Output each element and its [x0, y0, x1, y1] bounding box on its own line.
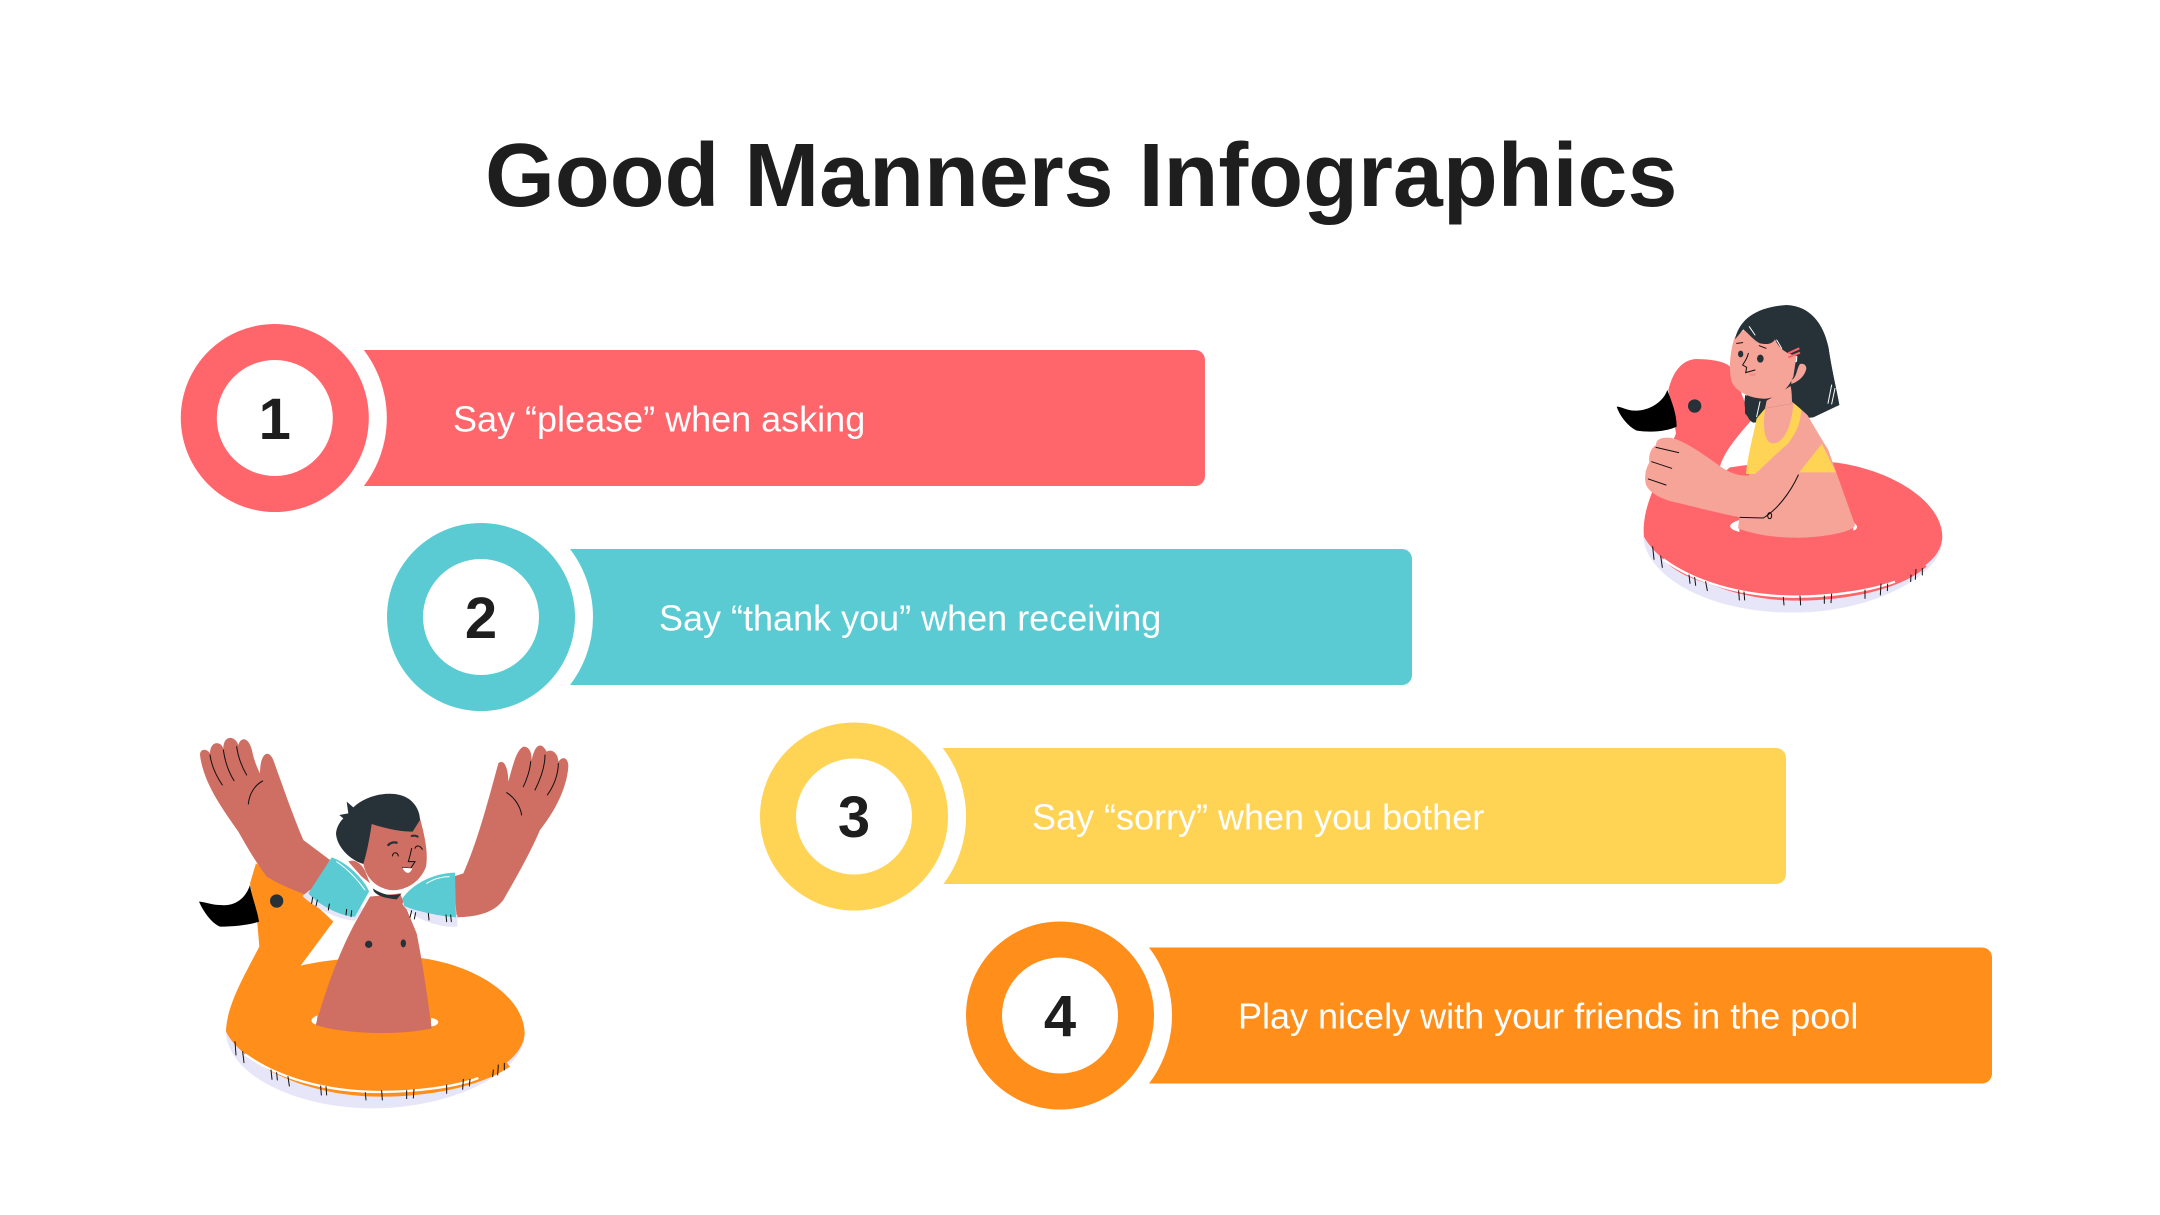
number ring 2 [387, 523, 575, 711]
label 3: Say “sorry” when you bother [1032, 796, 1484, 838]
ear [348, 861, 370, 883]
row 3: say sorry [742, 704, 1786, 928]
swimsuit [1746, 402, 1836, 474]
neck skin [1765, 386, 1793, 408]
bar 3 [880, 748, 1786, 884]
icon: boy in duck float [199, 738, 568, 1108]
row 1: say please [163, 306, 1205, 530]
neck shadow [373, 888, 402, 899]
left floatie [308, 857, 369, 917]
float lower stripe [1662, 553, 1927, 601]
number ring 3 [760, 722, 948, 910]
float stitches [1653, 547, 1922, 605]
label 4: Play nicely with your friends in the pool [1238, 996, 1858, 1036]
face features [388, 836, 422, 873]
label 1: Say “please” when asking [453, 398, 865, 440]
floatie stitches [312, 897, 451, 922]
beak [1617, 390, 1677, 432]
row 4: play nicely [948, 904, 1992, 1128]
bar 1 [300, 350, 1205, 486]
number 2: 2 [465, 586, 497, 651]
number 4: 4 [1044, 984, 1076, 1049]
flamingo eye [1688, 399, 1701, 413]
flamingo neck and head [1644, 359, 1752, 557]
row 2: say thank you [369, 505, 1412, 729]
gap around circle 4 [948, 904, 1172, 1128]
hair clip [1788, 348, 1800, 357]
hair front [1735, 305, 1839, 417]
float highlight [245, 1054, 478, 1092]
float shadow [226, 1027, 524, 1108]
float hole slivers [311, 1015, 438, 1027]
hair [336, 794, 420, 864]
duck eye [270, 894, 283, 908]
gap around circle 3 [742, 704, 966, 928]
face [1730, 323, 1797, 399]
float stitches [235, 1042, 504, 1100]
number 3: 3 [838, 785, 870, 850]
body [316, 893, 432, 1033]
arm and hand [1645, 420, 1822, 519]
face [363, 818, 427, 890]
right floatie shadow [402, 898, 457, 927]
bar 4 [1086, 948, 1992, 1084]
number ring 1 [181, 324, 369, 512]
right floatie [402, 873, 456, 917]
bar 2 [510, 549, 1412, 685]
float body [1644, 461, 1942, 596]
float hole slivers [1730, 520, 1857, 532]
number ring 4 [966, 922, 1154, 1110]
gap around circle 1 [163, 306, 387, 530]
body [1738, 402, 1855, 538]
float body [226, 863, 525, 1091]
gap around circle 2 [369, 505, 593, 729]
ear [1791, 364, 1806, 384]
beak [199, 885, 259, 927]
number 1: 1 [259, 387, 291, 452]
title: Good Manners Infographics [485, 126, 1677, 226]
hand lines [210, 747, 558, 815]
float lower stripe [244, 1050, 510, 1097]
hair highlights [1749, 327, 1835, 417]
icon: girl in flamingo float [1617, 305, 1942, 613]
float highlight [1663, 559, 1895, 597]
left floatie shadow [302, 890, 363, 921]
nipples [365, 939, 406, 948]
left arm raised [200, 738, 330, 896]
back hair [1745, 347, 1839, 423]
floatie highlights [337, 862, 449, 890]
float shadow [1643, 527, 1942, 613]
right arm raised [453, 745, 568, 917]
label 2: Say “thank you” when receiving [659, 598, 1161, 638]
hand lines [1648, 447, 1798, 519]
face features [1737, 343, 1766, 376]
neck shadow [1745, 387, 1793, 423]
